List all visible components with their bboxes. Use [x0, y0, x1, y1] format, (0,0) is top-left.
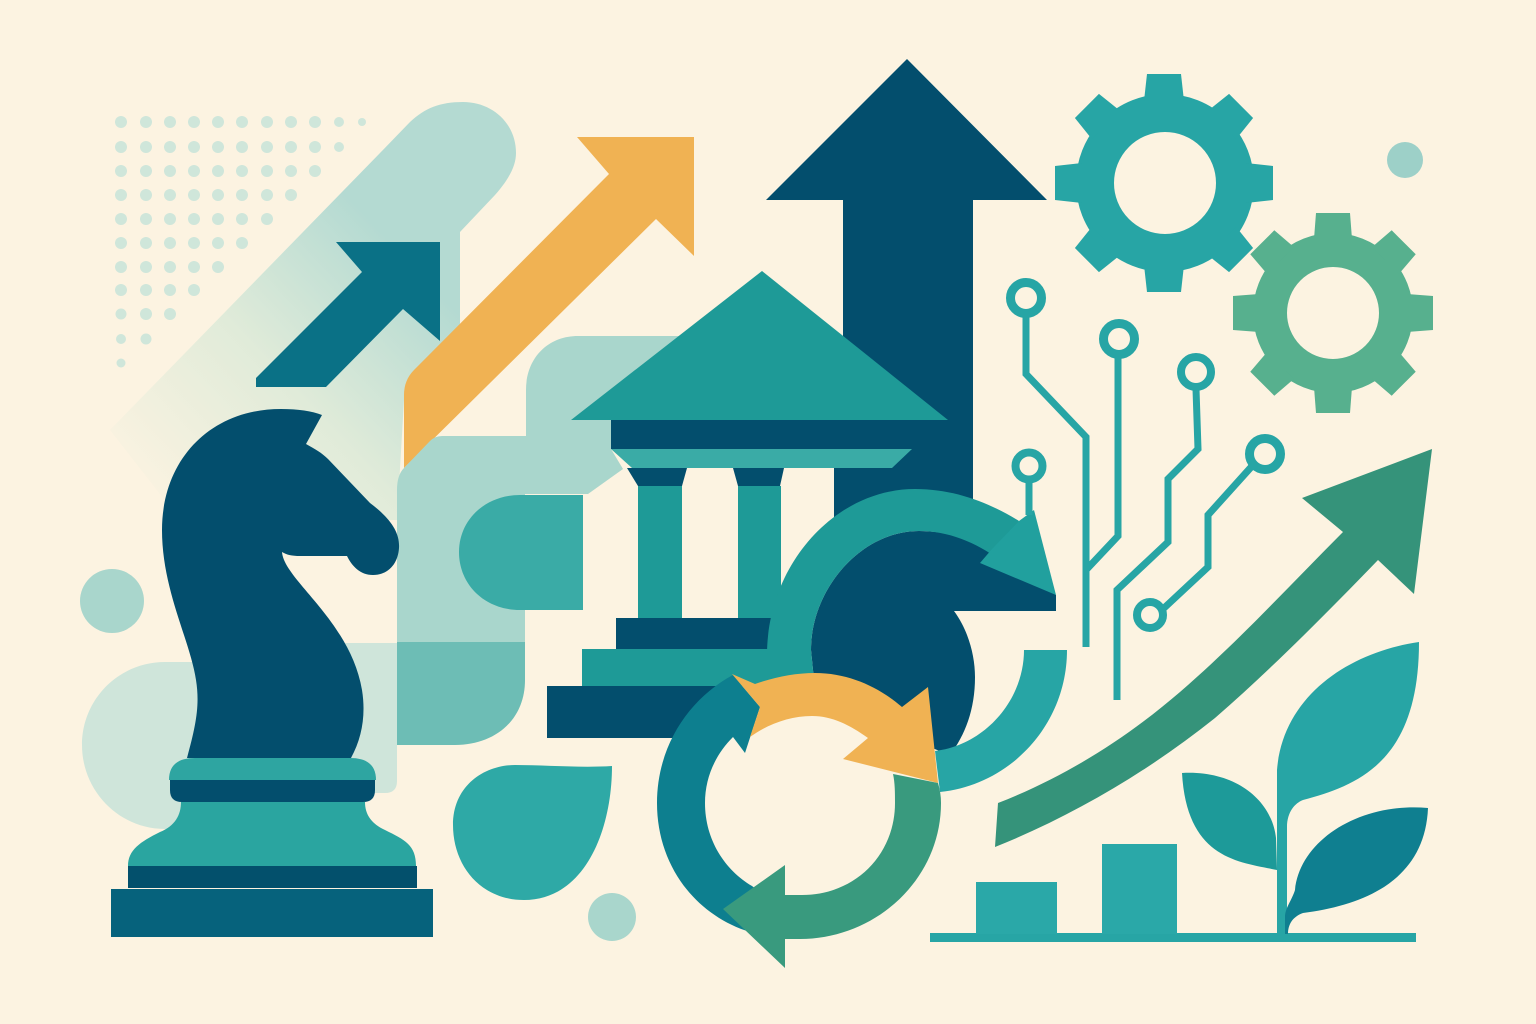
right leaf — [1285, 807, 1428, 934]
light blob behind chess knight — [82, 643, 397, 829]
decorative circle bottom — [588, 893, 636, 941]
recycling ring — [657, 673, 941, 968]
knight collar — [169, 758, 376, 780]
knight plinth — [111, 889, 433, 937]
short bar — [976, 882, 1057, 934]
teal rounded tab — [459, 495, 583, 610]
knight collar band — [170, 780, 375, 802]
teal drop shape — [453, 765, 612, 900]
decorative circle left — [80, 569, 144, 633]
teal cycle arrowhead — [980, 510, 1056, 595]
left column — [638, 486, 682, 618]
gear green — [1233, 213, 1433, 413]
large leaf with stem — [1277, 642, 1419, 934]
dot grid pattern — [115, 116, 366, 368]
circuit traces — [1010, 282, 1280, 700]
growth plant with bars — [930, 642, 1428, 942]
small teal arrow — [256, 242, 440, 387]
right column capital — [733, 468, 784, 486]
ground line — [930, 933, 1416, 942]
green segment — [723, 774, 941, 968]
rising green arrow — [995, 449, 1432, 847]
left column capital — [627, 468, 687, 486]
pale teal panel — [397, 336, 690, 642]
gear large teal — [1055, 74, 1273, 292]
knight base band — [128, 866, 417, 888]
bottom step — [547, 686, 727, 738]
decorative circle top right — [1387, 142, 1423, 178]
tall bar — [1102, 844, 1177, 934]
top step — [616, 618, 776, 650]
knight head and body — [162, 409, 399, 758]
yellow arrow — [404, 137, 694, 468]
navy circle blob inside cycle — [811, 531, 1056, 755]
left leaf — [1182, 773, 1277, 870]
knight bell base — [128, 802, 416, 866]
dark teal segment — [657, 675, 770, 932]
middle step — [582, 649, 782, 686]
temple roof — [571, 271, 948, 420]
temple — [547, 271, 973, 738]
large navy arrow — [766, 59, 1047, 520]
right column — [738, 486, 781, 618]
temple entablature — [611, 420, 973, 449]
teal cycle arc top — [767, 489, 1019, 700]
mid teal panel bottom — [397, 642, 525, 745]
chess knight — [111, 409, 433, 937]
yellow segment — [732, 673, 938, 783]
temple frieze — [611, 449, 912, 468]
teal cycle arc lower right — [935, 650, 1067, 792]
faded diagonal pill — [110, 102, 516, 520]
